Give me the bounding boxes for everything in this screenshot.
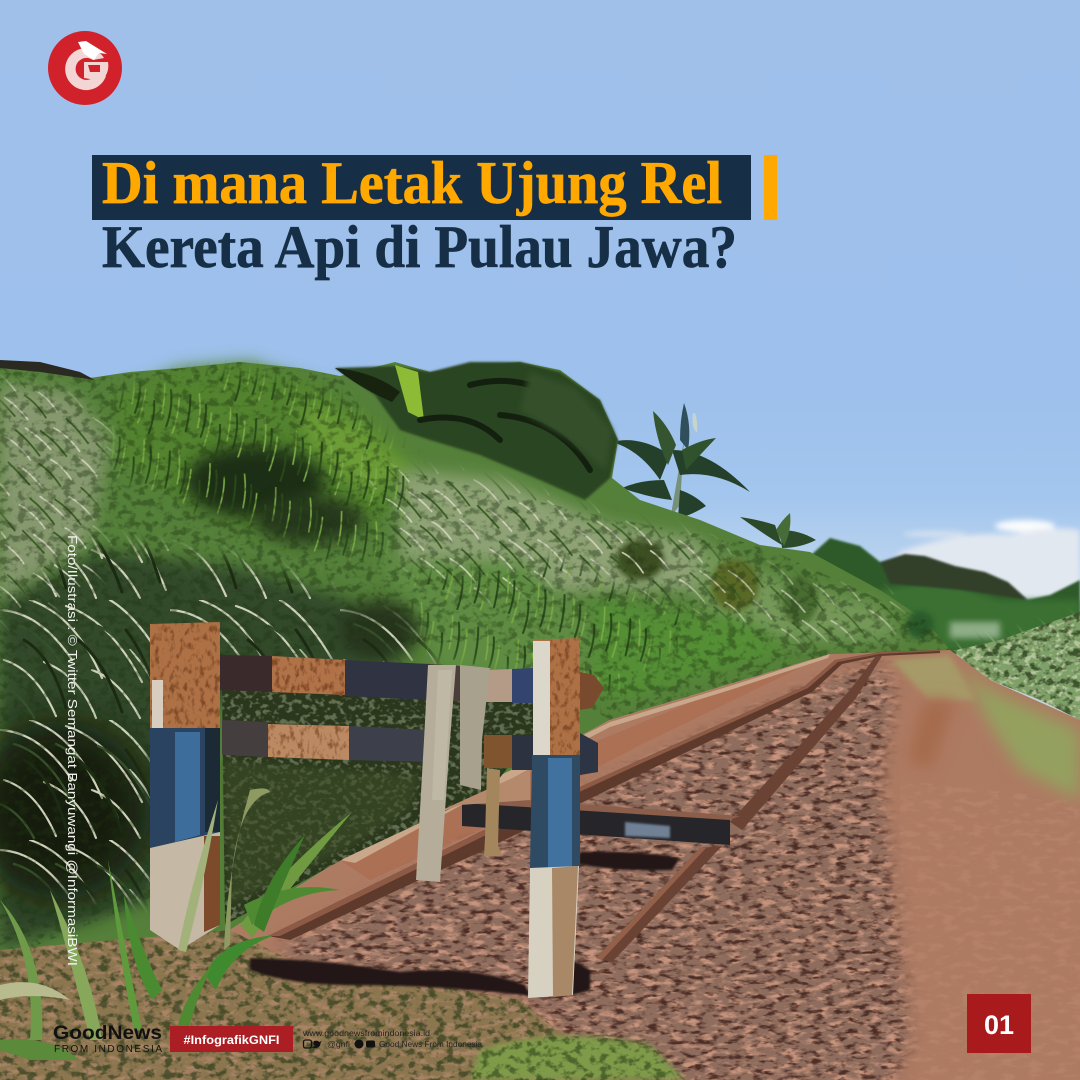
right grass bank	[948, 612, 1080, 720]
vegetation hill	[0, 350, 1074, 950]
rear right stub	[580, 672, 604, 710]
page number badge	[967, 994, 1031, 1053]
brand wordmark: GoodNews	[53, 1023, 162, 1044]
barrier: rusty striped rails and posts	[150, 622, 604, 998]
dirt base	[0, 650, 1080, 1080]
dark mound shadow	[185, 446, 325, 518]
small banana palm	[740, 513, 816, 548]
dark hollows	[616, 540, 664, 580]
tree mass top centre	[335, 362, 618, 500]
grass blade textures	[0, 374, 126, 628]
website and social handles: Good News From Indonesia	[379, 1039, 482, 1049]
foreground grass plant	[0, 788, 352, 1060]
left rail	[268, 650, 940, 940]
page number badge: 01	[984, 1010, 1014, 1040]
bright green mound	[115, 362, 420, 540]
social icons	[304, 1040, 375, 1048]
grass verge right	[955, 665, 1080, 800]
red track edge	[908, 700, 955, 770]
left post	[150, 622, 220, 950]
lower-left verge	[0, 930, 620, 1080]
pale grass slope centre	[400, 470, 720, 600]
clouds on the horizon	[880, 520, 1080, 600]
pale grass top left	[0, 385, 110, 600]
right rail	[596, 656, 882, 962]
cross beam	[462, 796, 740, 845]
droopy grass dark underlay	[0, 550, 400, 950]
rope support	[484, 768, 502, 856]
website and social handles: www.goodnewsfromindonesia.id	[302, 1028, 430, 1038]
title highlight band	[92, 155, 751, 220]
photo credit, vertical: Foto/Ilustrasi : © Twitter Semangat Banyuwangi @InformasiBWI	[65, 535, 80, 966]
hashtag badge	[170, 1026, 293, 1052]
upper bar	[220, 655, 534, 703]
lower bar	[222, 720, 598, 775]
green lower slope	[590, 600, 790, 700]
dark bush behind barrier	[222, 690, 534, 925]
big banana palm	[612, 403, 750, 520]
brand wordmark	[53, 1023, 162, 1055]
warm dirt speckle	[900, 780, 1080, 1080]
dark roof corner	[0, 360, 95, 380]
bottom green patch	[470, 1036, 685, 1080]
title line 1: Di mana Letak Ujung Rel	[102, 150, 722, 216]
hanging cloth strips	[416, 665, 490, 882]
title accent bar	[764, 155, 777, 220]
ground: dirt path and gravel	[0, 640, 1080, 1080]
track shadows	[250, 852, 680, 996]
brand wordmark: FROM INDONESIA	[54, 1044, 162, 1055]
distant treeline	[810, 538, 1080, 660]
photo: railway end scene	[0, 360, 1080, 1080]
right post	[528, 638, 580, 998]
website and social handles	[302, 1028, 482, 1049]
footer: brand, hashtag and social	[53, 1023, 482, 1055]
title line 2: Kereta Api di Pulau Jawa?	[102, 214, 737, 280]
gravel bed	[250, 640, 930, 1080]
logo: GNFI red roundel	[48, 31, 122, 105]
hill base	[0, 362, 950, 960]
hashtag badge: #InfografikGNFI	[184, 1033, 280, 1047]
title	[92, 150, 777, 280]
website and social handles: @gnfi	[327, 1039, 350, 1049]
